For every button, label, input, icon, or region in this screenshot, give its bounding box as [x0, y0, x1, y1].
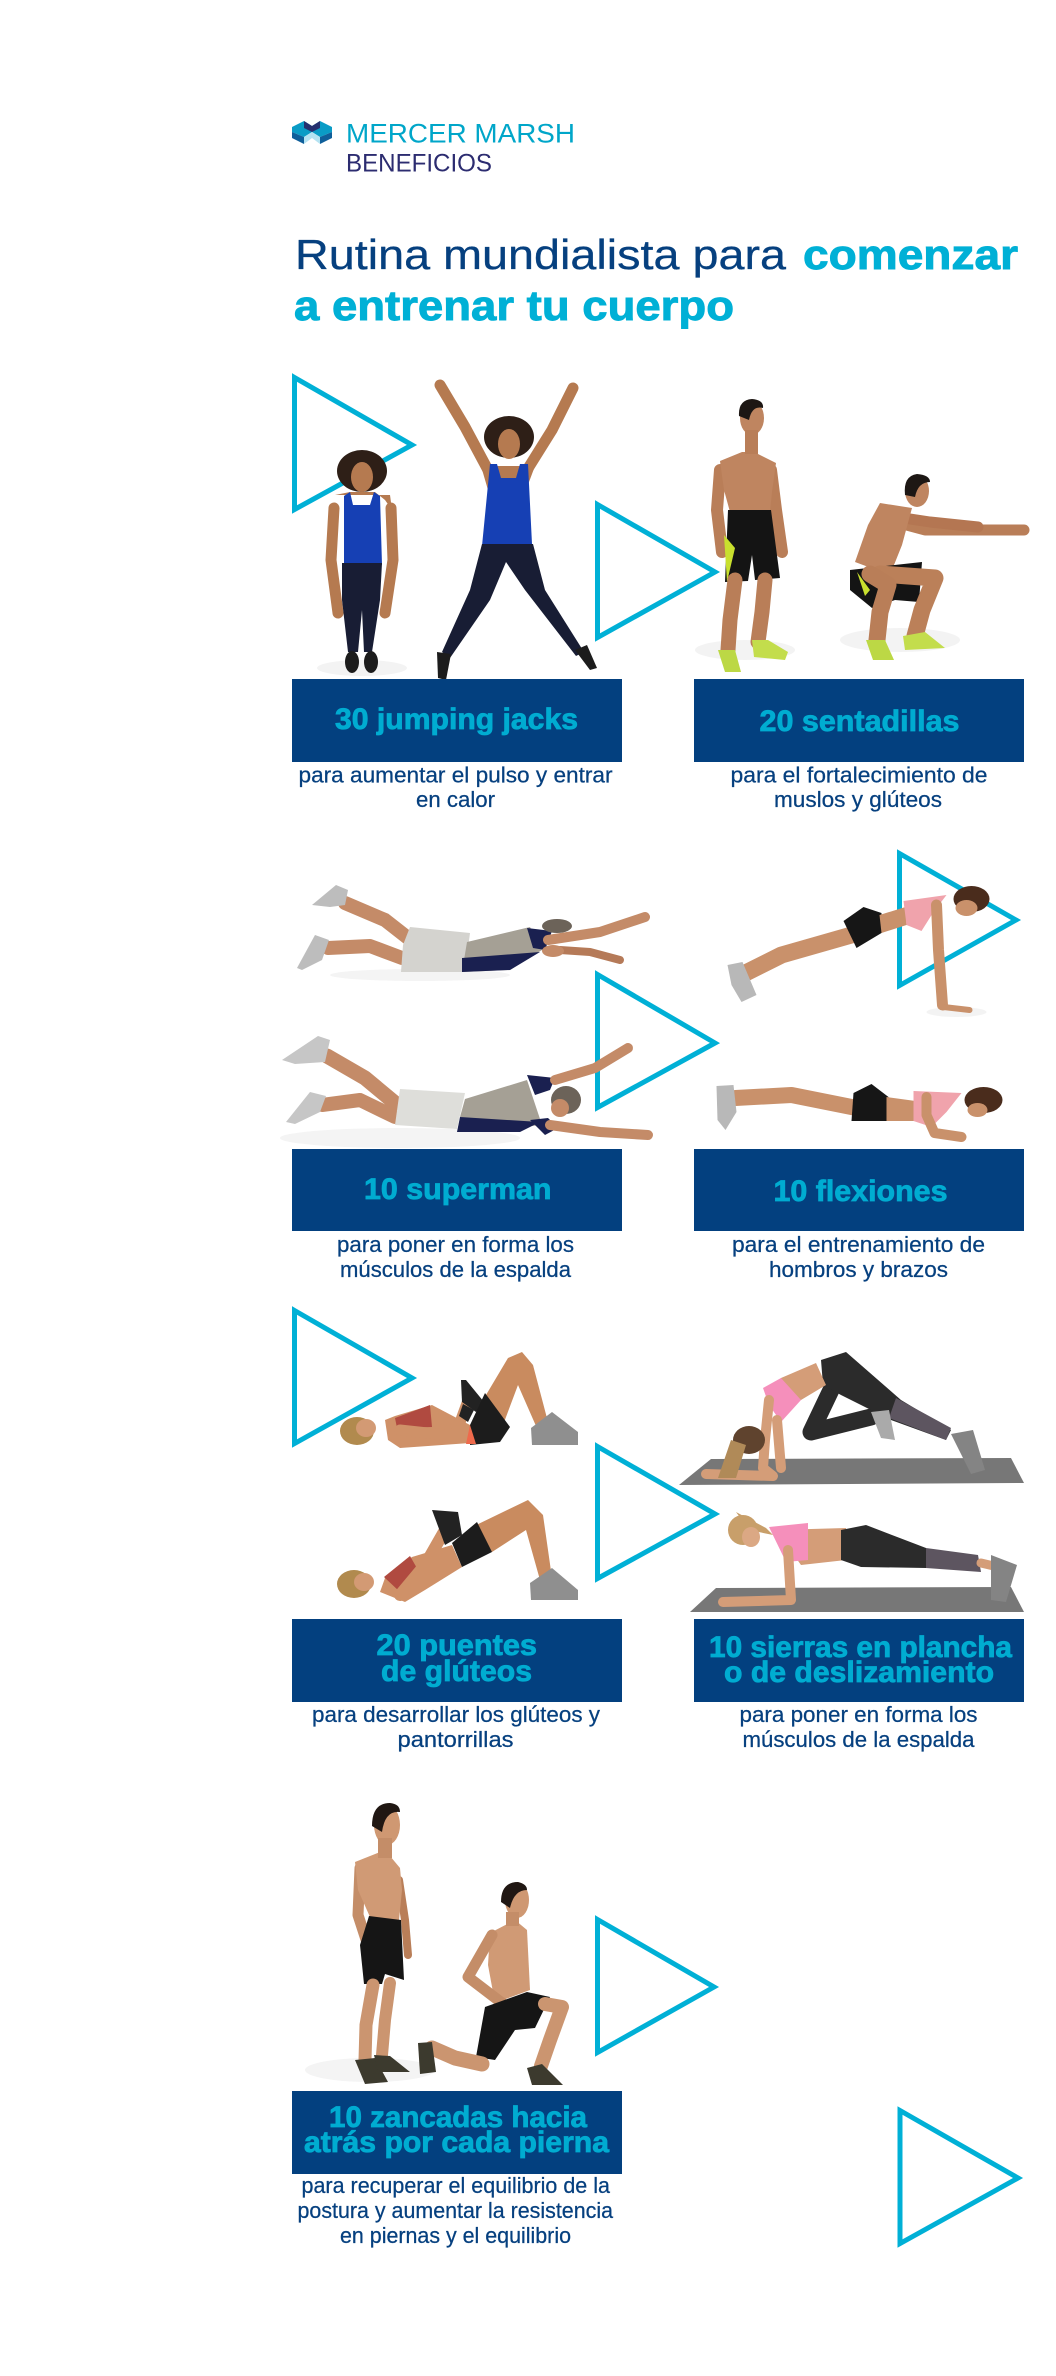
illustration: jumping jacks: [317, 385, 597, 680]
heading bar: [292, 1149, 622, 1231]
description: para desarrollar los glúteos y: [312, 1702, 600, 1727]
illustration: glute bridges: [337, 1352, 578, 1602]
description: [730, 762, 988, 812]
heading: o de deslizamiento: [724, 1656, 994, 1689]
description: [740, 1702, 978, 1752]
illustration: backward lunges: [305, 1803, 563, 2085]
description: para el fortalecimiento de: [730, 762, 988, 788]
heading: [709, 1631, 1012, 1689]
figure: bridge down: [340, 1352, 578, 1448]
figure: woman jumping: [437, 385, 597, 680]
heading: 30 jumping jacks: [335, 703, 578, 736]
description: para el entrenamiento de: [732, 1232, 985, 1257]
heading bar: [292, 679, 622, 762]
description: [298, 762, 612, 812]
figure: superman high: [280, 1036, 648, 1148]
label: 10 flexiones: [694, 1149, 1024, 1282]
figure: man standing: [717, 399, 788, 672]
label: 10 sierras en plancha: [694, 1619, 1024, 1752]
title: [294, 231, 1018, 329]
description: hombros y brazos: [769, 1257, 948, 1282]
logo: Mercer Marsh Beneficios: [292, 118, 575, 178]
description: en piernas y el equilibrio: [340, 2223, 571, 2248]
description: para recuperar el equilibrio de la: [302, 2173, 611, 2198]
description: [732, 1232, 985, 1282]
description: para aumentar el pulso y entrar: [298, 762, 612, 788]
heading: 10 zancadas hacia: [329, 2101, 587, 2134]
heading: 10 sierras en plancha: [709, 1631, 1012, 1664]
title: Rutina mundialista para: [295, 231, 787, 278]
figure: superman low: [297, 885, 645, 981]
heading: 20 sentadillas: [760, 705, 960, 738]
figure: man lunging: [418, 1882, 563, 2085]
description: para poner en forma los: [337, 1232, 574, 1257]
title: a entrenar tu cuerpo: [294, 282, 734, 329]
label: 10 zancadas hacia atrás: [292, 2091, 622, 2248]
description: [312, 1702, 600, 1752]
figure: push-up low: [716, 1084, 1002, 1137]
heading: 10 superman: [364, 1173, 552, 1206]
description: músculos de la espalda: [340, 1257, 572, 1282]
heading bar: [694, 1149, 1024, 1231]
figure: woman standing: [331, 450, 393, 673]
description: postura y aumentar la resistencia: [298, 2198, 614, 2223]
mat lower: [690, 1587, 1024, 1612]
heading bar: [694, 679, 1024, 762]
heading: atrás por cada pierna: [304, 2126, 609, 2159]
illustration: push-ups: [716, 886, 1002, 1137]
brand subtitle: BENEFICIOS: [346, 150, 492, 178]
illustration: plank saws: [679, 1352, 1024, 1612]
heading: [376, 1629, 537, 1688]
figure: man squatting: [850, 474, 1024, 660]
brand name: MERCER MARSH: [346, 118, 575, 148]
figure: push-up high: [728, 886, 990, 1017]
figure: plank raised: [706, 1352, 985, 1478]
description: pantorrillas: [398, 1727, 514, 1752]
heading bar: [292, 1619, 622, 1702]
icon: logo mark: [292, 121, 332, 144]
label: 20 puentes de glúteos: [292, 1619, 622, 1752]
description: en calor: [416, 787, 495, 812]
title: comenzar: [803, 231, 1018, 278]
heading: 10 flexiones: [774, 1175, 948, 1208]
heading bar: [694, 1619, 1024, 1702]
decorative triangle arrows: [294, 378, 1018, 2244]
heading bar: [292, 2091, 622, 2174]
description: músculos de la espalda: [742, 1727, 975, 1752]
illustration: squats: [695, 399, 1024, 672]
description: [298, 2173, 614, 2248]
heading: 20 puentes: [376, 1629, 537, 1662]
heading: de glúteos: [381, 1655, 532, 1688]
description: para poner en forma los: [740, 1702, 978, 1727]
description: [337, 1232, 574, 1282]
mat upper: [679, 1458, 1024, 1485]
description: muslos y glúteos: [774, 787, 942, 812]
illustration: superman: [280, 885, 648, 1148]
label: 30 jumping jacks: [292, 679, 622, 812]
figure: bridge up: [337, 1500, 578, 1602]
heading: [304, 2101, 609, 2159]
figure: plank low: [723, 1512, 1017, 1602]
label: 10 superman: [292, 1149, 622, 1282]
label: 20 sentadillas: [694, 679, 1024, 812]
figure: man standing: [355, 1803, 410, 2084]
